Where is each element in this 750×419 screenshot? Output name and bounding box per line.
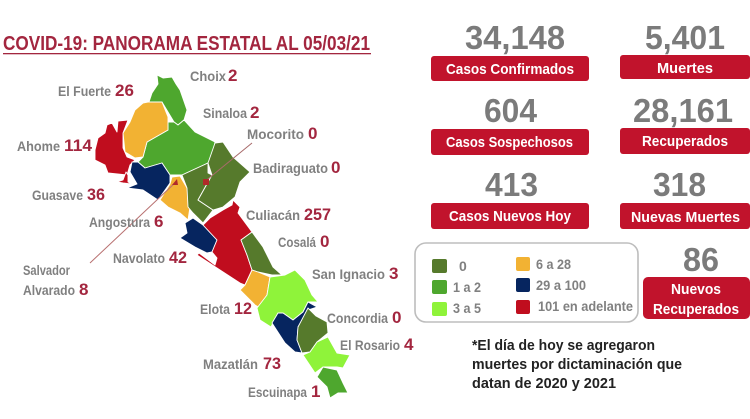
stat: Casos Confirmados [431, 19, 589, 81]
legend item: 6 a 28: 6 a 28 [536, 256, 571, 272]
label: Culiacan [246, 205, 331, 224]
label: Cosala: 0 [320, 232, 329, 251]
stat: Nuevas Muertes [620, 166, 750, 229]
leader line: Salvador Alvarado [90, 179, 178, 263]
stat: Nuevos Recuperados: 86 [683, 241, 719, 278]
label: El Fuerte [58, 81, 134, 100]
label: Badiraguato: Badiraguato [253, 160, 328, 176]
label: Navolato [113, 248, 187, 267]
label: Mazatlan [203, 354, 281, 373]
municipality: Navolato [180, 218, 217, 253]
label: Choix: 2 [228, 66, 237, 85]
stat: Casos Confirmados: Casos Confirmados [446, 61, 574, 78]
legend item: 3 a 5 [432, 300, 481, 316]
label: Culiacan: Culiacán [246, 207, 300, 223]
label: Navolato: Navolato [113, 250, 165, 266]
municipality: Ahome [95, 120, 135, 175]
label: Elota: 12 [234, 299, 252, 318]
label: Culiacan: 257 [304, 205, 331, 224]
label: El Fuerte: 26 [115, 81, 134, 100]
municipality: Concordia [297, 308, 328, 353]
legend item: 29 a 100 [516, 277, 586, 293]
label: Angostura: Angostura [89, 214, 150, 230]
label: Guasave: Guasave [32, 187, 83, 203]
label: Mazatlan: Mazatlán [203, 356, 258, 372]
municipality: Guasave [127, 162, 170, 200]
label: Guasave [32, 185, 105, 204]
legend item: 0 [432, 258, 467, 274]
label: Ahome [17, 136, 93, 155]
label: Choix: Choix [190, 68, 226, 84]
label: Salvador Alvarado: 8 [79, 280, 88, 299]
footnote: datan de 2020 y 2021 [472, 375, 616, 392]
stat: Nuevas Muertes: Nuevas Muertes [631, 209, 740, 226]
label: Sinaloa: Sinaloa [203, 105, 247, 121]
label: Escuinapa: Escuinapa [248, 384, 307, 400]
stat: Nuevos Recuperados: Recuperados [653, 301, 739, 318]
label: Concordia: 0 [392, 308, 401, 327]
label: Salvador Alvarado: Salvador [23, 262, 70, 278]
stat: Casos Sospechosos: 604 [484, 92, 538, 129]
label: Mazatlan: 73 [263, 354, 281, 373]
footnote: muertes por dictaminación que [472, 356, 682, 373]
municipality: Ahome island [117, 172, 132, 184]
title: COVID-19: PANORAMA ESTATAL AL 05/03/21 [3, 33, 370, 55]
municipality: Choix [149, 75, 187, 125]
stat: Recuperados [620, 92, 750, 154]
label: Ahome: 114 [64, 136, 93, 155]
legend item: 0: 0 [459, 258, 467, 274]
label: Ahome: Ahome [17, 138, 60, 154]
label: Salvador Alvarado [23, 262, 88, 299]
stat: Recuperados: Recuperados [642, 133, 728, 150]
municipality: San Ignacio [257, 270, 318, 327]
legend item: 1 a 2: 1 a 2 [453, 279, 481, 295]
municipality: El Fuerte [123, 102, 168, 158]
stat: Nuevos Recuperados [643, 241, 750, 319]
footnote: *El día de hoy se agregaron [472, 337, 655, 354]
label: Choix [190, 66, 237, 85]
municipality: Cosala [241, 232, 282, 275]
label: El Rosario: El Rosario [340, 337, 400, 353]
label: Mocorito: 0 [308, 124, 317, 143]
legend item: 1 a 2 [432, 279, 481, 295]
legend [415, 243, 638, 322]
label: Escuinapa: 1 [311, 382, 320, 401]
stat: Nuevas Muertes: 318 [653, 166, 706, 203]
legend item: 101 en adelante: 101 en adelante [538, 298, 633, 314]
stat: Muertes: 5,401 [645, 19, 725, 56]
municipality: Escuinapa [317, 367, 348, 398]
label: Salvador Alvarado: Alvarado [23, 282, 75, 298]
stat: Casos Nuevos Hoy [431, 166, 589, 229]
municipality: Elota [240, 270, 270, 308]
municipality: Badiraguato [198, 142, 250, 210]
label: Elota [200, 299, 252, 318]
municipality: Culiacan [197, 200, 252, 285]
stat: Nuevos Recuperados: Nuevos [671, 281, 721, 298]
label: Concordia: Concordia [327, 310, 388, 326]
municipality: Mazatlan [272, 302, 317, 353]
legend item: 6 a 28 [516, 256, 571, 272]
label: Cosala: Cosalá [278, 234, 316, 250]
label: San Ignacio: San Ignacio [312, 266, 385, 282]
label: Navolato: 42 [169, 248, 187, 267]
label: Elota: Elota [200, 301, 230, 317]
stat: Casos Sospechosos: Casos Sospechosos [446, 134, 573, 151]
map of Sinaloa municipalities [95, 75, 350, 398]
leader line: Mocorito [203, 143, 252, 185]
stat: Casos Sospechosos [431, 92, 589, 155]
municipality: El Rosario [303, 337, 350, 373]
legend item: 29 a 100: 29 a 100 [536, 277, 586, 293]
legend item: 3 a 5: 3 a 5 [453, 300, 481, 316]
label: Sinaloa: 2 [250, 103, 259, 122]
stat: Casos Confirmados: 34,148 [465, 19, 565, 56]
municipality: Mocorito [182, 163, 213, 223]
municipality: Sinaloa [138, 120, 215, 175]
label: Angostura: 6 [154, 212, 163, 231]
municipality: Angostura [160, 176, 190, 220]
label: Badiraguato: 0 [331, 158, 340, 177]
label: San Ignacio: 3 [389, 264, 398, 283]
label: Mocorito: Mocorito [247, 126, 304, 142]
stat: Muertes [620, 19, 750, 79]
stat: Casos Nuevos Hoy: 413 [485, 166, 538, 203]
label: El Rosario: 4 [404, 335, 414, 354]
stat: Recuperados: 28,161 [633, 92, 733, 129]
label: Guasave: 36 [87, 185, 105, 204]
footnote [472, 337, 682, 392]
stat: Casos Nuevos Hoy: Casos Nuevos Hoy [449, 208, 572, 225]
stat: Muertes: Muertes [657, 60, 713, 77]
label: El Fuerte: El Fuerte [58, 83, 111, 99]
